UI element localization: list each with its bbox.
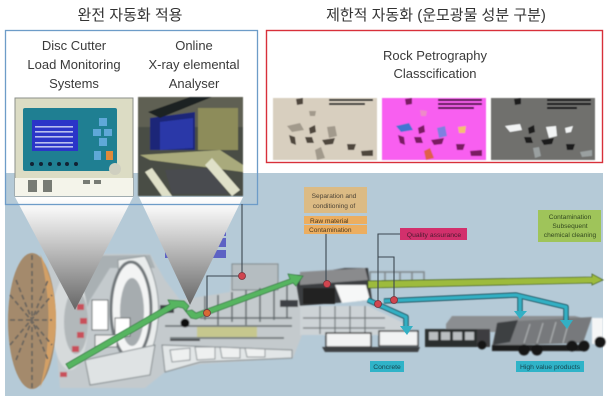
- label: concrete: [370, 361, 404, 372]
- text: disc cutter label: Load Monitoring: [27, 57, 121, 72]
- markers: sensor dots: [204, 272, 398, 316]
- illustration: trucks: [425, 316, 606, 356]
- text: X-ray label: Online: [175, 38, 213, 53]
- illustration: separation plant: [295, 268, 424, 352]
- label: high value products: [516, 361, 584, 372]
- callout: separation and conditioning: Contamination: [309, 227, 352, 234]
- chart: purple stripes: [165, 228, 226, 258]
- illustration: tunnel boring machine body: [48, 254, 302, 388]
- callout cone: X-ray analyser: [139, 197, 243, 305]
- callout: quality assurance: Quality assurance: [407, 232, 461, 239]
- arrow: teal product flow: [368, 295, 566, 328]
- callout: quality assurance: [400, 228, 467, 240]
- text: X-ray label: Analyser: [169, 76, 220, 91]
- image: plain light micrograph: [273, 98, 377, 160]
- text: X-ray label: X-ray elemental: [148, 57, 240, 72]
- panel: full automation frame: [6, 30, 258, 204]
- heading: full automation: 완전 자동화 적용: [78, 7, 182, 24]
- image: crossed polars micrograph: [491, 98, 595, 160]
- callout: separation and conditioning: Separation and: [312, 193, 357, 200]
- callout: separation and conditioning: [304, 187, 367, 234]
- callout: contamination cleaning: [538, 210, 601, 242]
- arrow: green material flow: [66, 274, 303, 369]
- text: disc cutter label: Systems: [49, 76, 99, 91]
- image: X-ray analyser photo: [138, 97, 243, 196]
- callout cone: load monitor: [15, 197, 133, 310]
- text: rock petrography label: Classcification: [393, 66, 477, 81]
- arrow shafts: teal highlight: [368, 295, 566, 328]
- connector lines: [207, 204, 400, 313]
- panel: limited automation frame: [266, 30, 602, 162]
- callout: separation and conditioning: conditioning of: [313, 203, 355, 210]
- label: high value products: High value products: [520, 364, 581, 371]
- panel: TBM process background: [5, 173, 603, 396]
- callout: contamination cleaning: chemical cleaning: [544, 232, 597, 239]
- callout: separation and conditioning: Raw material: [310, 218, 349, 225]
- label: concrete: Concrete: [373, 364, 401, 371]
- heading: limited automation: 제한적 자동화 (운모광물 성분 구분): [326, 7, 546, 24]
- image: load monitor device: [15, 98, 133, 196]
- arrow heads: teal: [400, 311, 573, 335]
- text: disc cutter label: Disc Cutter: [42, 38, 107, 53]
- callout: contamination cleaning: Subsequent: [552, 223, 588, 230]
- arrow: green-yellow contamination stream: [368, 274, 603, 288]
- image: gypsum plate micrograph: [382, 98, 486, 160]
- text: rock petrography label: Rock Petrography: [383, 48, 488, 63]
- illustration: cutter head: [8, 253, 56, 389]
- callout: contamination cleaning: Contamination: [549, 214, 592, 221]
